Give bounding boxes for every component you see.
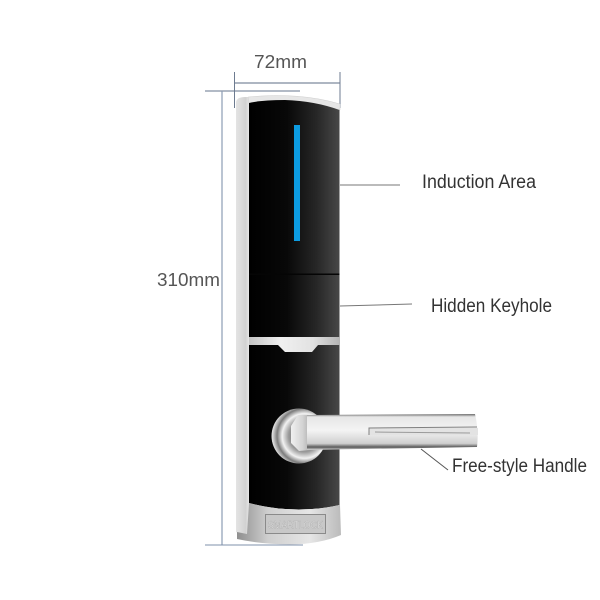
silver strip with notch [249,337,340,352]
callout: Induction Area: Induction Area [422,172,536,193]
lock top white cap [248,96,340,110]
callout: Free-style Handle: Free-style Handle [452,456,587,477]
callout: Hidden Keyhole: Hidden Keyhole [431,296,552,317]
upper black panel [249,100,340,337]
silver foot with brand plate [237,503,341,544]
seam above hidden keyhole panel [249,274,340,275]
handle neck [291,415,310,451]
door lock [236,96,478,544]
handle slot [369,427,478,435]
blue induction light [294,125,300,241]
dimension: 72mm width [234,51,340,108]
lock left silver edge [236,97,250,538]
handle [272,408,478,464]
brand plate: SMARTLOCK [268,520,324,532]
handle bar [307,414,478,450]
handle rose [272,408,326,464]
dimension label: 72mm: 72mm [254,51,307,72]
dimension label: 310mm: 310mm [157,269,220,290]
callout: Free-style Handle [421,449,587,477]
lower black panel [249,345,340,510]
